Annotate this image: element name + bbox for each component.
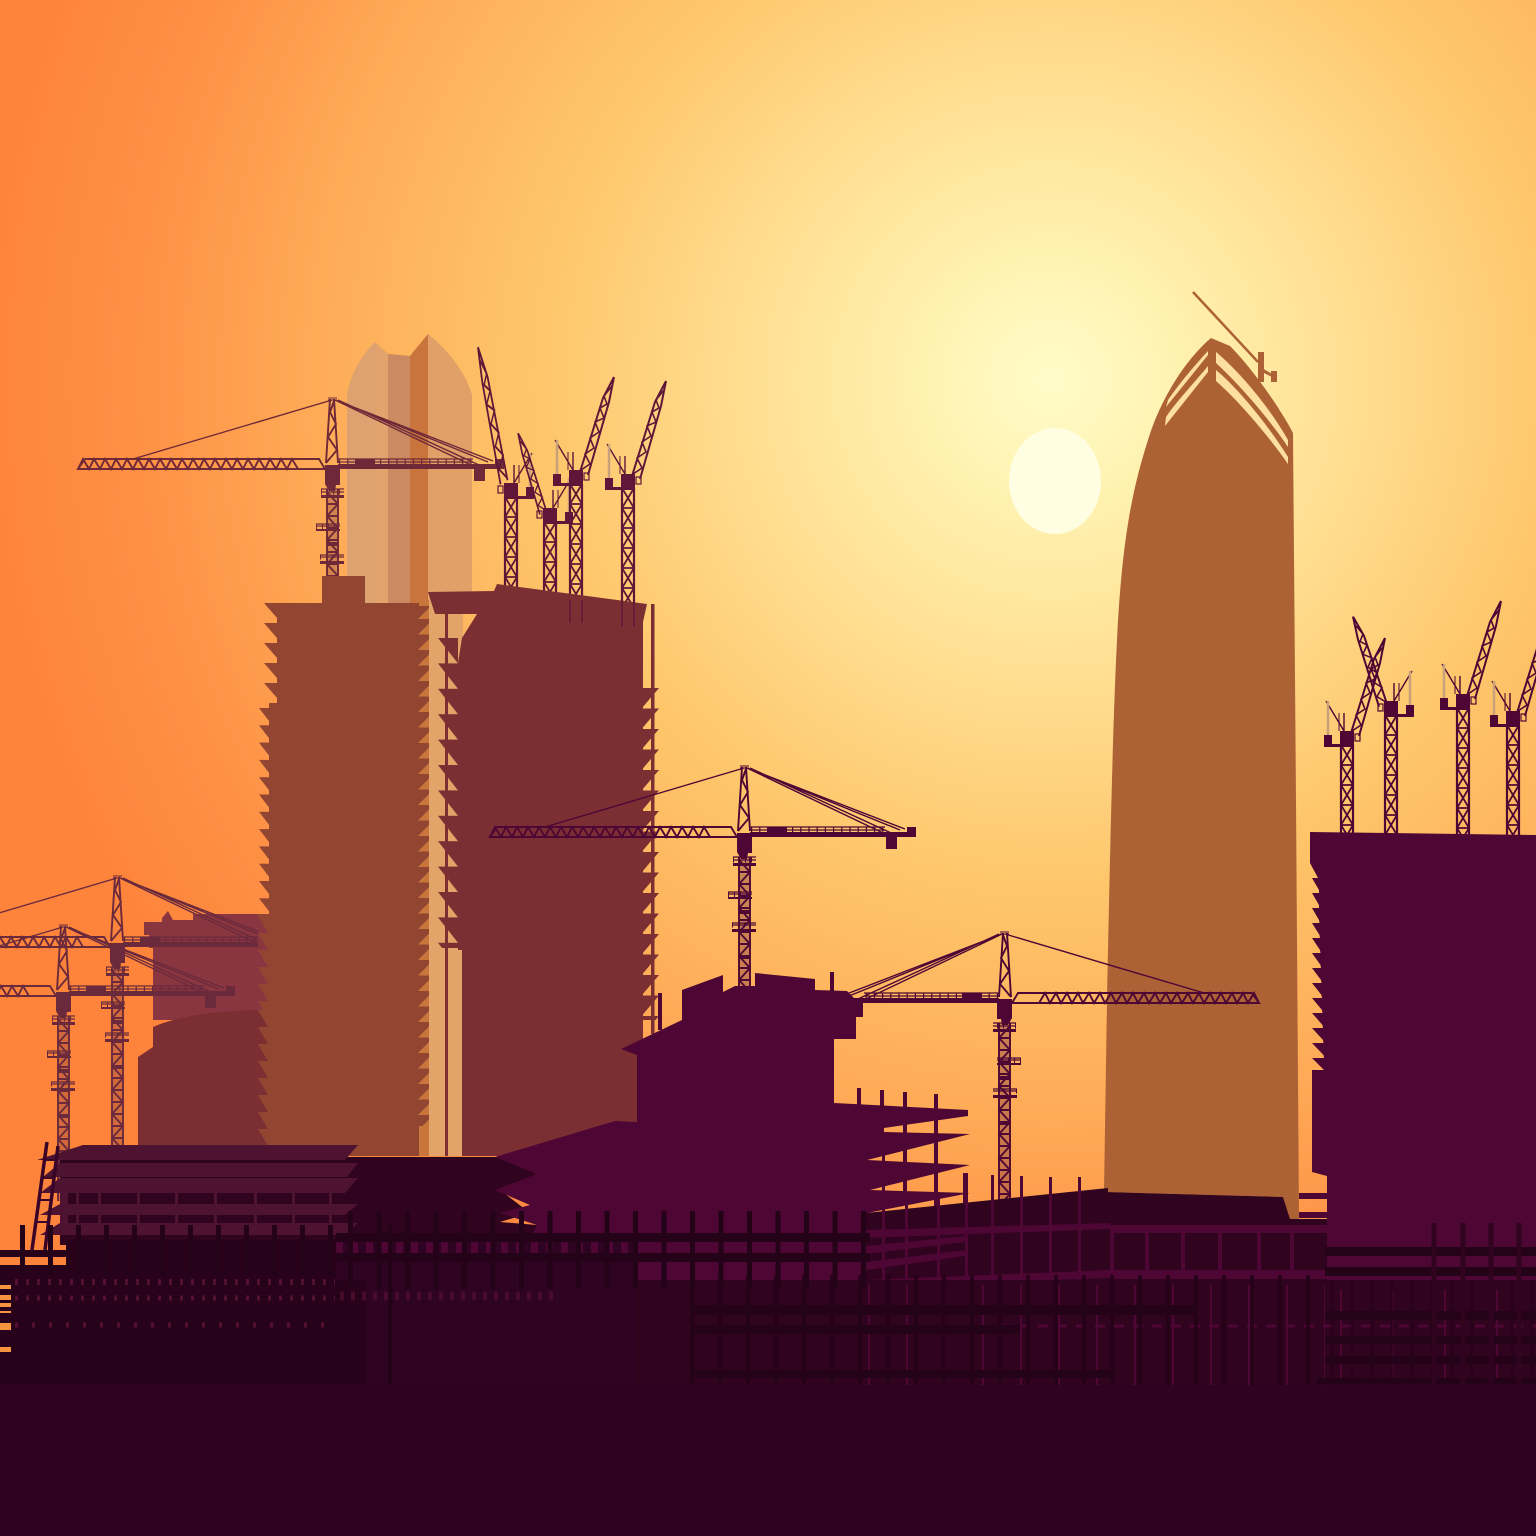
dark low block behind center	[345, 1157, 537, 1290]
tower one: brown sawtooth highrise	[258, 576, 429, 1156]
crane: far left upper tower crane	[0, 876, 289, 1152]
luffing crane 1	[478, 347, 534, 717]
lower scaffolding layer	[0, 1223, 1536, 1386]
scaffold: purple lines in dark zone	[336, 1250, 1536, 1335]
luffing crane 2	[518, 433, 573, 742]
scaffold: dark block left	[0, 1278, 336, 1385]
right luffing crane 3	[1440, 601, 1501, 928]
perspective building frame	[866, 1173, 1327, 1286]
right purple block building	[1299, 832, 1536, 1290]
light gap strips between towers	[418, 600, 463, 1156]
crane: top left tower crane	[78, 398, 504, 674]
ladder scaffold on left	[32, 1142, 58, 1250]
tower two: maroon sawtooth highrise	[428, 584, 659, 1156]
luffing crane 4	[605, 381, 666, 708]
sun	[1009, 428, 1101, 534]
right luffing crane 1	[1324, 638, 1385, 965]
tall tapered tower with crown	[1104, 292, 1299, 1219]
crane: right tower crane	[833, 932, 1259, 1208]
luffing crane 3	[553, 377, 614, 704]
scaffold: small window flecks	[15, 1282, 560, 1325]
rooftop crane arm	[1193, 292, 1258, 362]
right luffing crane 2	[1353, 617, 1414, 935]
back building with dome	[138, 911, 262, 1145]
right luffing crane 4	[1490, 618, 1536, 945]
pale distant tower	[347, 334, 472, 605]
crown windows	[1165, 351, 1288, 464]
scaffold: left edge bars and holes	[0, 1250, 66, 1352]
scaffold: vertical poles	[20, 1250, 1536, 1330]
center purple building with cantilever floors	[495, 972, 970, 1290]
ground	[0, 1385, 1536, 1536]
low left building with floor slabs	[37, 1145, 358, 1245]
crane: far left lower tower crane	[0, 925, 235, 1201]
scaffold: horizontal bars centre	[336, 1233, 1536, 1384]
crane: center tower crane	[490, 766, 916, 1042]
